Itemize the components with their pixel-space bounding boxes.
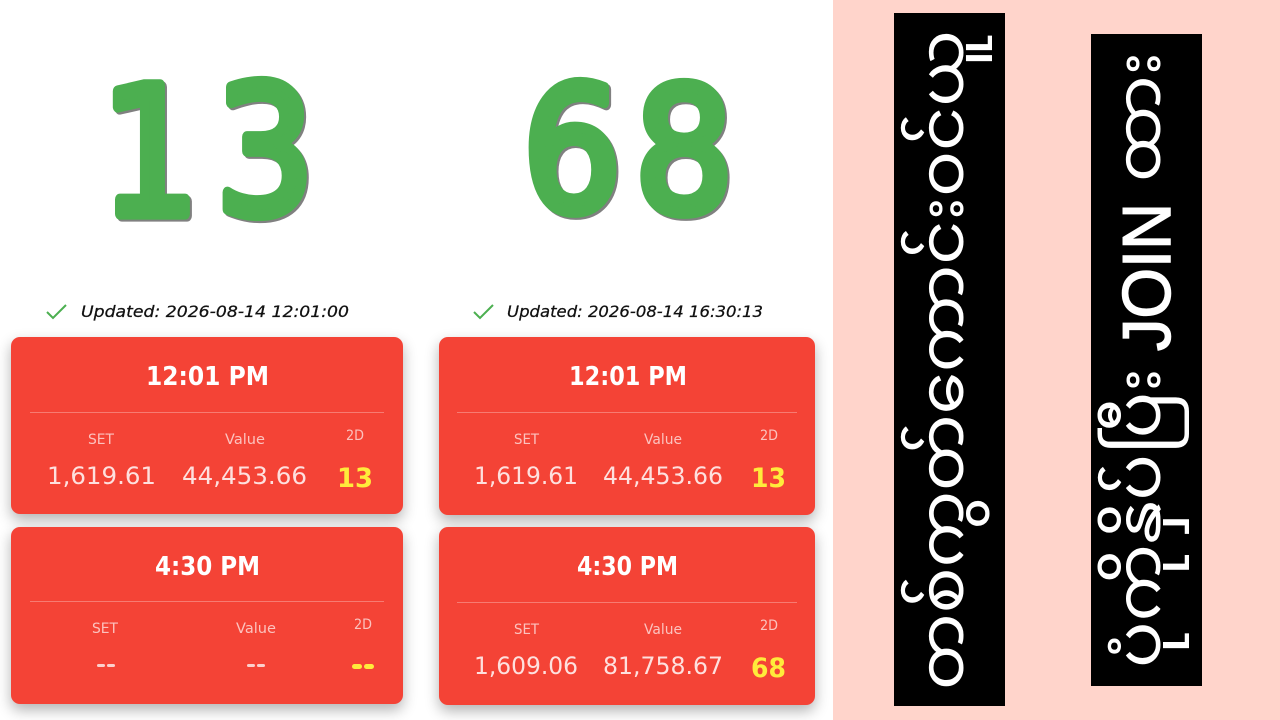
big number 13: 3 [216, 50, 314, 256]
card content: right 4:30 PM: 81,758.67 [603, 652, 723, 680]
dashes [97, 664, 105, 667]
card content: left 4:30 PM: 4:30 PM [155, 552, 260, 582]
big number 68: 8 [635, 51, 733, 252]
big number 13 [101, 50, 316, 259]
card content: right 4:30 PM [457, 552, 797, 684]
card content: left 4:30 PM [30, 552, 384, 669]
card content: right 12:01 PM: 12:01 PM [569, 362, 687, 392]
card content: left 12:01 PM: 44,453.66 [182, 462, 307, 490]
card content: left 4:30 PM: 2D [354, 617, 372, 633]
vertical text right: JOIN [1109, 203, 1185, 351]
card content: right 4:30 PM: 1,609.06 [474, 652, 578, 680]
black bar left [894, 13, 1005, 706]
card: left 12:01 PM background [11, 337, 403, 514]
card content: right 12:01 PM: 13 [751, 463, 786, 494]
big number 13: 1 [103, 53, 201, 259]
black bar right [1091, 34, 1202, 686]
card: right 12:01 PM background [439, 337, 815, 515]
card content: left 12:01 PM: SET [88, 432, 114, 448]
card content: right 4:30 PM: SET [514, 622, 539, 638]
updated time left: Updated: 2026-08-14 12:01:00 [81, 302, 349, 321]
card content: left 12:01 PM: 1,619.61 [47, 462, 156, 490]
card content: right 12:01 PM [457, 362, 797, 494]
card content: right 12:01 PM: SET [514, 432, 539, 448]
big number 13: 1 [101, 51, 199, 257]
card content: left 12:01 PM: Value [225, 432, 265, 448]
card content: left 12:01 PM: 13 [337, 463, 373, 494]
icon: check right [474, 305, 493, 318]
card content: right 12:01 PM: 44,453.66 [603, 462, 723, 490]
card: left 4:30 PM background [11, 527, 403, 704]
card content: right 4:30 PM: 4:30 PM [577, 552, 678, 582]
card content: left 12:01 PM [30, 362, 384, 494]
icon: check left [47, 305, 66, 318]
card content: right 12:01 PM: Value [644, 432, 682, 448]
big number 13: 3 [218, 52, 316, 258]
card content: left 4:30 PM: Value [236, 621, 276, 637]
vertical text right [1097, 52, 1189, 668]
card content: left 12:01 PM: 12:01 PM [146, 362, 269, 392]
card content: right 4:30 PM: 2D [760, 618, 778, 634]
card content: right 4:30 PM: Value [644, 622, 682, 638]
big number 68: 6 [523, 50, 621, 251]
vertical Myanmar text left: တစ်ကွတ်ကောင်းဝင်ယူ [900, 30, 992, 690]
big number 68 [523, 50, 735, 254]
updated time right: Updated: 2026-08-14 16:30:13 [507, 302, 763, 321]
vertical text right: ပုံကိုနှိပ်ပြီး [1097, 368, 1189, 668]
card content: right 12:01 PM: 1,619.61 [474, 462, 578, 490]
card content: left 12:01 PM: 2D [346, 428, 364, 444]
big number 68: 6 [525, 52, 623, 253]
card content: right 4:30 PM: 68 [751, 653, 786, 684]
vertical text right: ထား [1105, 52, 1174, 182]
card: right 4:30 PM background [439, 527, 815, 705]
card content: right 12:01 PM: 2D [760, 428, 778, 444]
card content: left 4:30 PM: SET [92, 621, 118, 637]
big number 68: 8 [637, 53, 735, 254]
panel: right pink background [833, 0, 1280, 720]
